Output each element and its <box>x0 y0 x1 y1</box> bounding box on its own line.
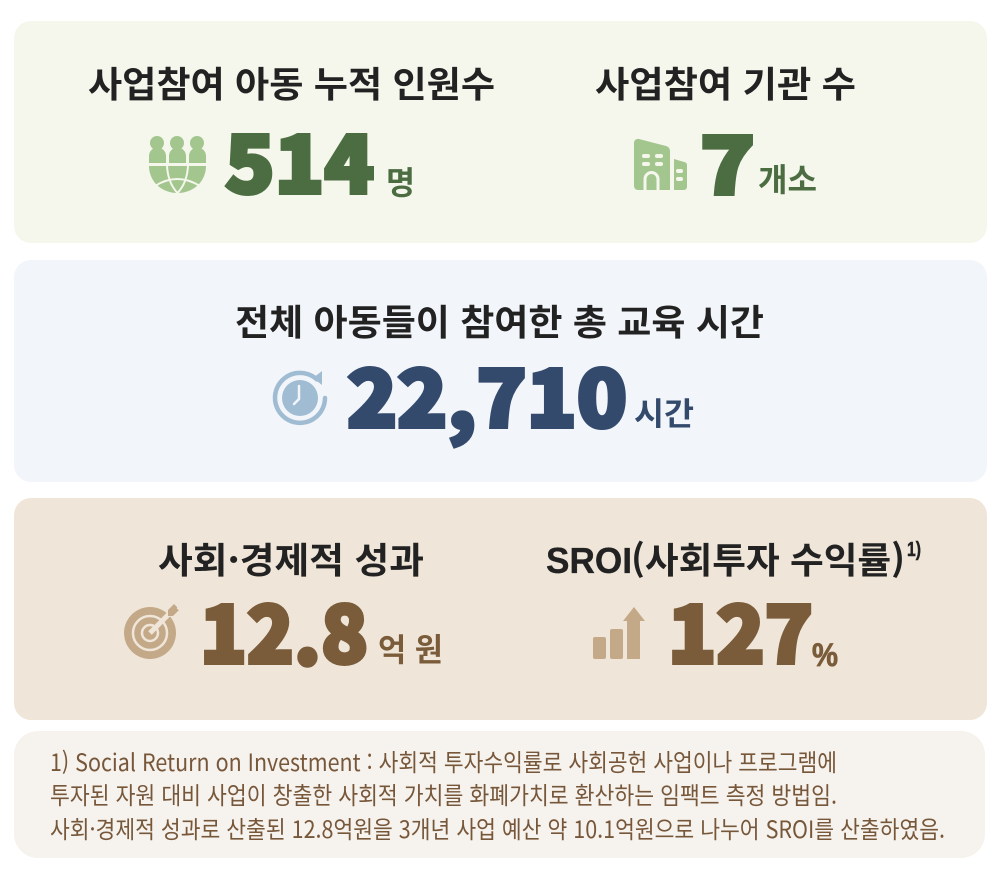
footnote marker: 1) <box>907 539 921 561</box>
heading: total hours: 전체 아동들이 참여한 총 교육 시간 <box>235 294 764 346</box>
unit: places: 개소 <box>758 155 817 201</box>
unit: hours: 시간 <box>634 389 694 435</box>
number: 7: 7 <box>700 105 755 217</box>
icon: people globe <box>149 136 206 193</box>
number: 22,710: 22,710 <box>347 338 627 450</box>
panel: participants and institutions <box>14 21 987 243</box>
unit: people: 명 <box>386 158 415 204</box>
footnote line 1: 1) Social Return on Investment : 사회적 투자수익률로 사회공헌 사업이나 프로그램에 <box>50 743 837 778</box>
heading: social economic value: 사회·경제적 성과 <box>158 532 424 584</box>
icon: target <box>124 604 179 659</box>
heading: SROI: SROI <box>546 540 632 581</box>
heading: institutions: 사업참여 기관 수 <box>595 56 856 108</box>
panel: education hours <box>14 260 987 482</box>
footnote line 2: 투자된 자원 대비 사업이 창출한 사회적 가치를 화폐가치로 환산하는 임팩트 측정 방법임. <box>50 776 837 811</box>
number: 514: 514 <box>225 104 374 216</box>
panel: footnote <box>14 731 985 858</box>
unit: hundred million won: 억 원 <box>378 625 443 671</box>
number: 12.8: 12.8 <box>200 574 368 686</box>
icon: clock <box>275 371 325 423</box>
number: 127: 127 <box>668 574 813 686</box>
icon: building <box>634 139 687 190</box>
heading: SROI: (사회투자 수익률) <box>631 532 905 584</box>
heading: cumulative children: 사업참여 아동 누적 인원수 <box>88 56 495 108</box>
icon: rising bars <box>593 607 645 659</box>
panel: social economic results <box>14 498 987 720</box>
unit: percent: % <box>812 637 838 673</box>
